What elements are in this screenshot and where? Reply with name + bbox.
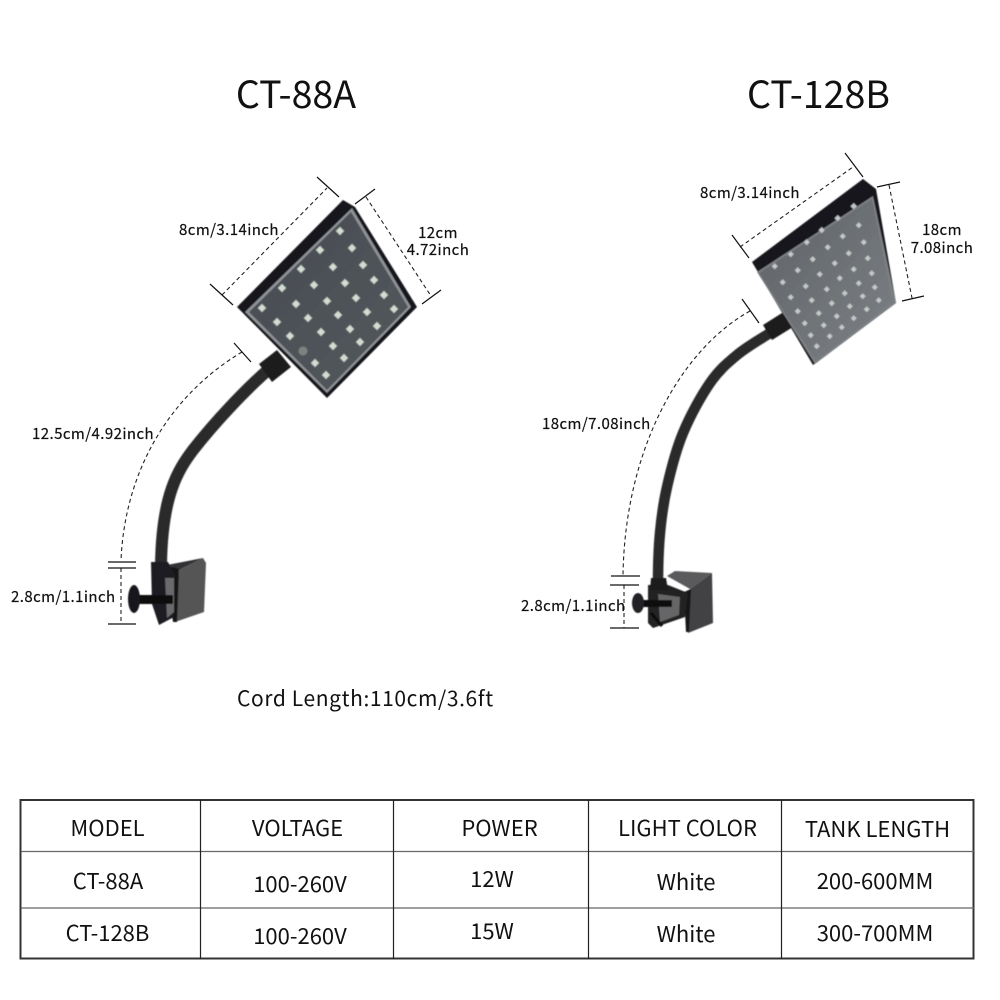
table row: CT-88A [73, 862, 933, 899]
table header row: MODEL [70, 811, 145, 843]
dimension: CT-88A width [179, 177, 339, 305]
table row: CT-88A: CT-88A [73, 864, 144, 896]
label: 8cm B: 8cm/3.14inch [700, 182, 800, 203]
label: 8cm A: 8cm/3.14inch [179, 219, 279, 240]
table row: CT-88A: White [657, 865, 715, 897]
table row: CT-88A: 200-600MM [817, 864, 933, 896]
title: CT-88A: CT-88A [236, 64, 356, 119]
table header row: TANK LENGTH [805, 812, 950, 844]
table row: CT-88A: 100-260V [253, 867, 347, 899]
table header row: POWER [461, 811, 538, 843]
table row: CT-128B: 300-700MM [817, 916, 933, 948]
dimension: CT-128B width [700, 153, 863, 258]
lamp head B [752, 179, 896, 365]
collar A [259, 350, 291, 382]
product: CT-88A lamp [128, 200, 417, 625]
label: 12cm A: 12cm [418, 222, 458, 243]
specification table [20, 800, 974, 959]
label: arm B: 18cm/7.08inch [542, 413, 651, 434]
dimension: CT-128B height [877, 182, 973, 301]
label: 18cm B: 7.08inch [911, 237, 973, 258]
lamp head A [237, 200, 417, 398]
dimension: CT-88A clamp [11, 562, 136, 624]
table row: CT-128B: White [657, 917, 715, 949]
cord length note: Cord Length:110cm/3.6ft [237, 683, 494, 713]
dimension: CT-88A height [355, 189, 469, 304]
label: clamp A: 2.8cm/1.1inch [11, 586, 116, 607]
label: clamp B: 2.8cm/1.1inch [521, 595, 626, 616]
table row: CT-128B [66, 914, 933, 951]
wall clamp A [128, 558, 206, 625]
dimension: CT-128B arm length [542, 299, 759, 575]
title: CT-128B: CT-128B [747, 64, 890, 119]
collar B [763, 313, 793, 340]
product: CT-128B lamp [632, 179, 896, 633]
label: 18cm B: 18cm [922, 219, 962, 240]
wall clamp B [632, 571, 713, 633]
table row: CT-88A: 12W [470, 862, 514, 894]
table header row: LIGHT COLOR [618, 811, 757, 843]
table row: CT-128B: 15W [470, 914, 514, 946]
table header row [70, 811, 950, 844]
table row: CT-128B: CT-128B [66, 916, 149, 948]
table header row: VOLTAGE [252, 811, 343, 843]
label: 12cm A: 4.72inch [407, 239, 469, 260]
dimension: CT-128B clamp [521, 576, 640, 628]
dimension: CT-88A arm length [32, 343, 251, 560]
gooseneck arm B [658, 333, 770, 584]
label: arm A: 12.5cm/4.92inch [32, 423, 154, 444]
table row: CT-128B: 100-260V [253, 919, 347, 951]
gooseneck arm A [161, 370, 268, 565]
